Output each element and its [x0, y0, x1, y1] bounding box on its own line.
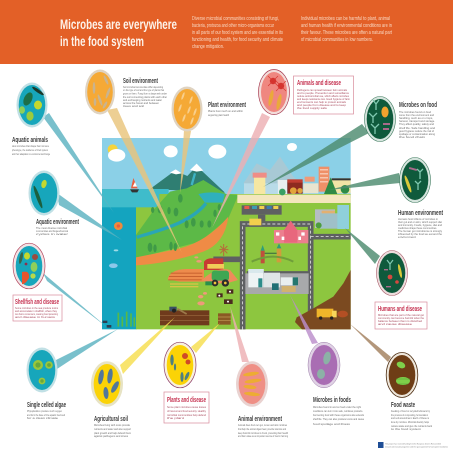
- label: plant environment: supporting plant health: [208, 113, 229, 117]
- title: in the food system: [60, 33, 144, 49]
- green harvester: [205, 271, 229, 287]
- title: Microbes are everywhere: [60, 16, 177, 32]
- sun: [108, 144, 118, 154]
- label: microbes on food: come from the environment and: [399, 113, 434, 117]
- intro text left: in all parts of our food system and are essential in its: [192, 30, 283, 36]
- label box: plants and disease: the plant: [167, 416, 184, 420]
- bus: [249, 219, 261, 225]
- label: single celled algae: and form the base of the aquatic food web: [27, 413, 65, 417]
- beam: microbes on food: [263, 124, 369, 187]
- beam: food waste: [350, 324, 391, 362]
- label: human environment: Humans host trillions of microbes in: [398, 217, 438, 221]
- farm plot: [203, 269, 238, 283]
- label box: humans and disease: Humans and disease: [378, 306, 422, 313]
- label: human environment: their gut and on skin, which support diet: [398, 220, 442, 224]
- label: microbes on food: shelf life. Safe handling and: [399, 126, 435, 130]
- school: [274, 221, 308, 243]
- label: food waste: the process of composting, fermentation: [391, 413, 428, 417]
- label: agricultural soil: against pathogens and stress: [94, 434, 128, 438]
- label: human environment: environment: [398, 235, 416, 239]
- label box: humans and disease: [375, 302, 427, 329]
- label: microbes in foods: conditions can turn it into safe, nutritious products.: [313, 409, 363, 413]
- label: soil environment: across the forest and between: [123, 101, 159, 105]
- city buildings: [244, 167, 351, 195]
- label: aquatic environment: [36, 219, 79, 236]
- label: aquatic animals: and their adaptation to environmental change: [12, 152, 50, 156]
- label box: animals and disease: reduce antimicrobial use, which affects microbes: [297, 94, 349, 98]
- microbe circle: animal environment: [236, 361, 268, 407]
- label: agricultural soil: plant growth and help defend them: [94, 431, 131, 435]
- mountains: [150, 166, 225, 193]
- intro text right: [301, 16, 392, 43]
- label: agricultural soil: Agricultural soil: [94, 416, 128, 423]
- label: microbes in foods: Microbes in foods: [313, 397, 351, 404]
- label: human environment: influenced by the food we eat and the: [398, 232, 442, 236]
- label box: plants and disease: microbial communities help defend: [167, 413, 206, 417]
- beam: shellfish and disease: [43, 273, 108, 328]
- label: food waste: [391, 402, 432, 431]
- trees: [148, 194, 221, 252]
- food factory: [245, 269, 309, 294]
- microbe circle: food waste: [386, 352, 418, 398]
- EU funding note: [378, 442, 448, 448]
- hospital: [315, 205, 349, 229]
- fish: [109, 222, 123, 268]
- land: [136, 194, 351, 329]
- river: [137, 203, 206, 237]
- orange soil band: [136, 217, 228, 265]
- microbe circle: agricultural soil: [91, 361, 123, 407]
- label box: shellfish and disease: Shellfish and disease: [15, 299, 59, 306]
- sea surface: [102, 189, 169, 208]
- label: soil environment: and exchanging nutrients and water: [123, 98, 162, 102]
- label: aquatic animals: Aquatic animals: [12, 137, 48, 144]
- label: soil environment: grow on them. Fungi form a large web under: [123, 92, 167, 96]
- underwater vehicle: [103, 321, 111, 328]
- microbe circle: microbes on food: [364, 96, 396, 142]
- label: aquatic environment: The most diverse microbial: [36, 226, 67, 230]
- microbe circle: single celled algae: [26, 348, 58, 392]
- label: microbes in foods: food spoilage and illness: [313, 422, 351, 426]
- label: food waste: reduce waste and give the nutrients back: [391, 424, 432, 428]
- label box: animals and disease: the food supply safe: [297, 106, 327, 110]
- hill: [136, 180, 238, 258]
- label: microbes in foods: [313, 397, 364, 426]
- label: soil environment: [123, 78, 167, 108]
- ploughed field: [160, 310, 231, 325]
- deep sea: [102, 207, 137, 329]
- lake: [198, 192, 225, 203]
- label box: plants and disease: [164, 392, 209, 423]
- label box: shellfish and disease: [13, 295, 62, 321]
- label box: animals and disease: and keeps resistance low. Good hygiene of farm: [297, 97, 350, 101]
- label: animal environment: and their value as an important source of food in farming: [238, 434, 288, 438]
- label: plant environment: [208, 102, 246, 117]
- microbe circle: humans and disease: [376, 250, 408, 296]
- intro text left: change mitigation.: [192, 44, 224, 50]
- label box: shellfish and disease: and accumulate in shellfish, where they: [15, 309, 57, 313]
- label: plant environment: Plants host much on and within: [208, 109, 243, 113]
- label: microbes on food: the food chain: [399, 135, 425, 139]
- car park: [242, 205, 282, 221]
- label box: shellfish and disease: and disease in humans: [15, 315, 56, 319]
- beam: humans and disease: [345, 228, 380, 264]
- microbe circle: microbes in foods: [308, 342, 340, 388]
- tractor: [169, 307, 187, 314]
- intro text right: and human health if environmental conditions are in: [301, 23, 392, 29]
- label: animal environment: Animal environment: [238, 416, 282, 423]
- beam: aquatic environment: [57, 193, 122, 240]
- label: animal environment: that help the animal digest feed, provide vitamins and: [238, 427, 286, 431]
- crop field: [168, 269, 204, 282]
- label: microbes on food: good hygiene reduce the risk of: [399, 129, 434, 133]
- beam: plants and disease: [191, 323, 220, 353]
- road network: [213, 224, 351, 329]
- pigs: [194, 256, 207, 305]
- header band: [0, 0, 453, 64]
- label: aquatic animals: [12, 137, 50, 156]
- cows: [217, 289, 233, 304]
- label: food waste: and soil amendment. Each of these is: [391, 416, 429, 420]
- label: microbes in foods: Fermenting food with these organisms also extends: [313, 413, 364, 417]
- label box: plants and disease: of harvest and food security. Healthy: [167, 409, 206, 413]
- city strip: [237, 195, 351, 203]
- label box: animals and disease: Pathogens can spread between farm animals: [297, 88, 347, 92]
- label box: animals and disease: and to people. Prevention and surveillance: [297, 91, 349, 95]
- label: microbes on food: handling, such as on crops,: [399, 116, 433, 120]
- label: microbes in foods: shelf life. They can also produce toxins and cause: [313, 417, 364, 421]
- label: animal environment: [238, 416, 288, 438]
- label: aquatic environment: Aquatic environment: [36, 219, 79, 226]
- microbe circle: shellfish and disease: [13, 243, 45, 289]
- barn: [204, 258, 223, 270]
- label: soil environment: the soil connecting plants with each other: [123, 95, 167, 99]
- windmill: [219, 244, 228, 256]
- label: microbes on food: harvest, transport and storage.: [399, 119, 435, 123]
- label: soil environment: trees and soil: [123, 104, 144, 108]
- microbe circle: aquatic environment: [28, 170, 60, 216]
- playground: [252, 243, 293, 263]
- sky: [102, 138, 351, 198]
- intro text left: [192, 16, 283, 50]
- label: animal environment: Animals have their own gut, rumen and skin microbes: [238, 423, 287, 427]
- label box: animals and disease: [294, 76, 354, 114]
- label: microbes in foods: Microbes found in and on food under the right: [313, 405, 361, 409]
- intro text right: of microbial communities in low numbers.: [301, 37, 373, 43]
- seaweed: [118, 312, 134, 327]
- farm: [168, 244, 238, 287]
- microbe circle: soil environment: [85, 70, 115, 114]
- label: aquatic animals: Host microbes that shape their immune: [12, 144, 49, 148]
- microbe circle: human environment: [400, 158, 430, 202]
- beam: animals and disease: [212, 113, 270, 228]
- label: human environment: [398, 210, 443, 239]
- label: single celled algae: for a clean climate: [27, 416, 58, 420]
- microbe circle: plant environment: [172, 86, 202, 132]
- label box: plants and disease: Plants and disease: [167, 397, 206, 404]
- label: agricultural soil: [94, 416, 131, 438]
- label: agricultural soil: nutrients and water and also support: [94, 427, 131, 431]
- EU funding note: This project has received funding from the European Union's Horizon 2020: [385, 442, 441, 446]
- label: food waste: to the food system: [391, 427, 422, 431]
- intro text right: their favour. These microbes are often a natural part: [301, 30, 392, 36]
- label: soil environment: Soil environment: [123, 78, 158, 85]
- beam: soil environment: [107, 108, 182, 253]
- label: microbes on food: spoilage or contamination along: [399, 132, 435, 136]
- label box: animals and disease: environments can help to protect animals: [297, 100, 346, 104]
- label box: humans and disease: and cause disease: [378, 322, 412, 326]
- beam: microbes in foods: [290, 295, 318, 344]
- intro text right: Individual microbes can be harmful to plant, animal: [301, 16, 390, 22]
- label: animal environment: keep harmful microbes in check, protecting their health: [238, 431, 288, 435]
- label: single celled algae: Single celled algae: [27, 402, 66, 409]
- central food system scene: [102, 138, 351, 329]
- intro text left: bacteria, protozoa and other micro-organisms occur: [192, 23, 274, 29]
- intro text left: functioning and health, for food security and climate: [192, 37, 283, 43]
- waste truck: [317, 309, 348, 320]
- label box: humans and disease: Microbes that are part of the natural gut: [378, 313, 424, 317]
- microbe circle: plants and disease: [164, 342, 196, 388]
- label: soil environment: Soil microbial communities differ depending: [123, 85, 163, 89]
- beam: plant environment: [180, 130, 191, 193]
- label: plant environment: Plant environment: [208, 102, 246, 109]
- label: aquatic environment: cycles in water: [36, 232, 68, 236]
- beam: agricultural soil: [120, 317, 175, 374]
- beam: human environment: [328, 173, 400, 190]
- sailing boat: [130, 178, 139, 192]
- microbe circle: animals and disease: [258, 70, 290, 114]
- label: soil environment: on the type of soil and the type of plants that: [123, 88, 164, 92]
- beam: animal environment: [230, 306, 249, 362]
- clouds: [108, 143, 297, 162]
- smoke: [243, 157, 303, 185]
- label: food waste: Food waste: [391, 402, 415, 409]
- label: food waste: Feeding of food or recycled leftovers by: [391, 409, 430, 413]
- label box: animals and disease: Animals and disease: [297, 80, 341, 87]
- label: human environment: The human gut microbiome is strongly: [398, 229, 442, 233]
- label: single celled algae: [27, 402, 66, 420]
- label: human environment: and immunity. Foods, hygiene, diet and: [398, 223, 442, 227]
- label box: animals and disease: and people from disease and to keep: [297, 103, 346, 107]
- callout beams: [43, 108, 400, 374]
- microbe circle: aquatic animals: [16, 82, 48, 128]
- label: microbes on food: [399, 102, 437, 139]
- label: food waste: done by microbes. Microbial diversity helps: [391, 420, 429, 424]
- beam: aquatic animals: [43, 113, 114, 213]
- label: microbes on food: The microbes found on food: [399, 110, 431, 114]
- label box: shellfish and disease: can harm consumers, causing food poisoning: [15, 312, 58, 316]
- label box: plants and disease: Some plant microbes cause losses: [167, 405, 206, 409]
- label: microbes on food: They affect quality, safety and: [399, 122, 434, 126]
- label: single celled algae: Phytoplankton produce much oxygen: [27, 409, 62, 413]
- beam: single celled algae: [56, 329, 118, 369]
- label box: humans and disease: community can become harmful when the: [378, 316, 424, 320]
- intro text left: Diverse microbial communities consisting of fungi,: [192, 16, 279, 22]
- label box: humans and disease: balance between them is disturbed: [378, 319, 422, 323]
- label: aquatic animals: phenotype, the resilience of their system: [12, 148, 48, 152]
- waste mound: [295, 270, 351, 329]
- label: aquatic environment: communities and biogeochemical: [36, 229, 68, 233]
- title: [60, 16, 177, 49]
- label: human environment: medicines shape these communities.: [398, 226, 437, 230]
- label box: shellfish and disease: Some microbes in the sea produce toxins: [15, 306, 58, 310]
- label: agricultural soil: Microbes living with roots provide: [94, 423, 130, 427]
